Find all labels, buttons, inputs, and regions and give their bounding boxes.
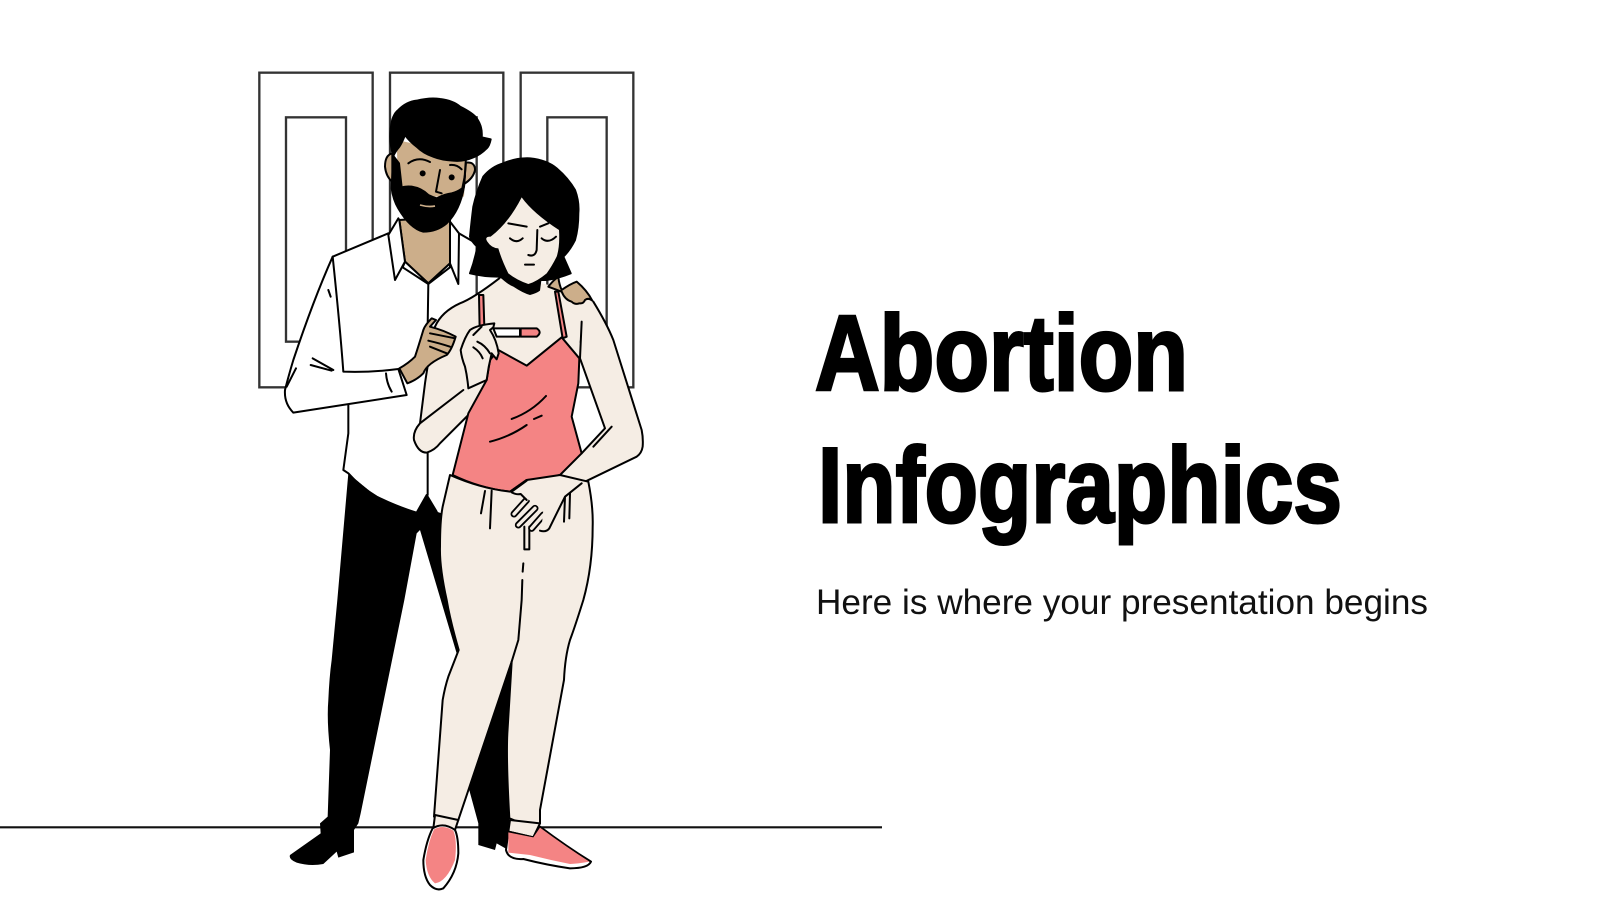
finger fills — [514, 500, 543, 528]
man face edge — [464, 157, 466, 187]
floor line — [0, 826, 882, 828]
man shirt fill — [333, 233, 473, 513]
man brows and nose — [408, 159, 462, 193]
woman chest and left arm outline — [414, 278, 499, 453]
man face — [397, 140, 467, 197]
test stick — [493, 328, 520, 337]
woman face — [486, 197, 559, 284]
illustration: couple with pregnancy test — [259, 73, 643, 889]
title — [815, 293, 1342, 545]
man neck — [399, 217, 450, 283]
woman right arm outline — [580, 302, 643, 483]
hand outline — [512, 481, 582, 531]
pregnancy test — [493, 328, 540, 337]
woman camisole straps — [479, 292, 567, 347]
woman trousers — [434, 475, 593, 824]
man trousers — [290, 473, 513, 865]
woman eyes nose mouth — [510, 230, 556, 265]
man shirt outline — [333, 233, 473, 513]
camisole creases — [490, 396, 546, 442]
woman hand holding test — [461, 323, 499, 388]
right shoe sole — [506, 827, 591, 868]
holding hand finger lines — [473, 327, 490, 358]
woman fingers on belly — [514, 500, 543, 528]
man eye right — [449, 174, 455, 180]
man mouth — [420, 205, 435, 206]
man beard — [392, 156, 465, 232]
hand finger lines — [428, 333, 455, 353]
woman brows — [508, 223, 548, 227]
man hand on shoulder — [548, 277, 592, 304]
finger outlines — [514, 500, 543, 528]
man hand on chest — [399, 318, 456, 383]
windows background — [259, 73, 633, 387]
left shoe sole — [423, 825, 458, 889]
man eyes — [420, 170, 426, 176]
woman — [399, 158, 643, 889]
woman ankle socks — [433, 815, 540, 837]
woman chest and left arm fill — [414, 278, 593, 453]
man shirt sleeve — [285, 257, 407, 413]
woman neck shadow — [499, 270, 542, 295]
man — [285, 98, 513, 865]
arm crease — [593, 427, 612, 447]
man hair — [390, 98, 491, 161]
sleeve creases — [287, 290, 392, 392]
title line 1: Abortion — [815, 293, 1188, 413]
woman hair — [470, 158, 579, 280]
title line 2: Infographics — [818, 425, 1342, 545]
woman right arm fill — [553, 300, 643, 483]
test tip — [521, 328, 540, 337]
subtitle: Here is where your presentation begins — [816, 583, 1428, 622]
right shoe upper — [508, 828, 589, 864]
man collar — [388, 218, 459, 284]
woman hand on belly — [512, 478, 582, 531]
woman camisole — [453, 337, 582, 492]
left shoe upper — [426, 827, 456, 883]
trouser lines — [481, 491, 570, 662]
man ears — [385, 153, 475, 184]
